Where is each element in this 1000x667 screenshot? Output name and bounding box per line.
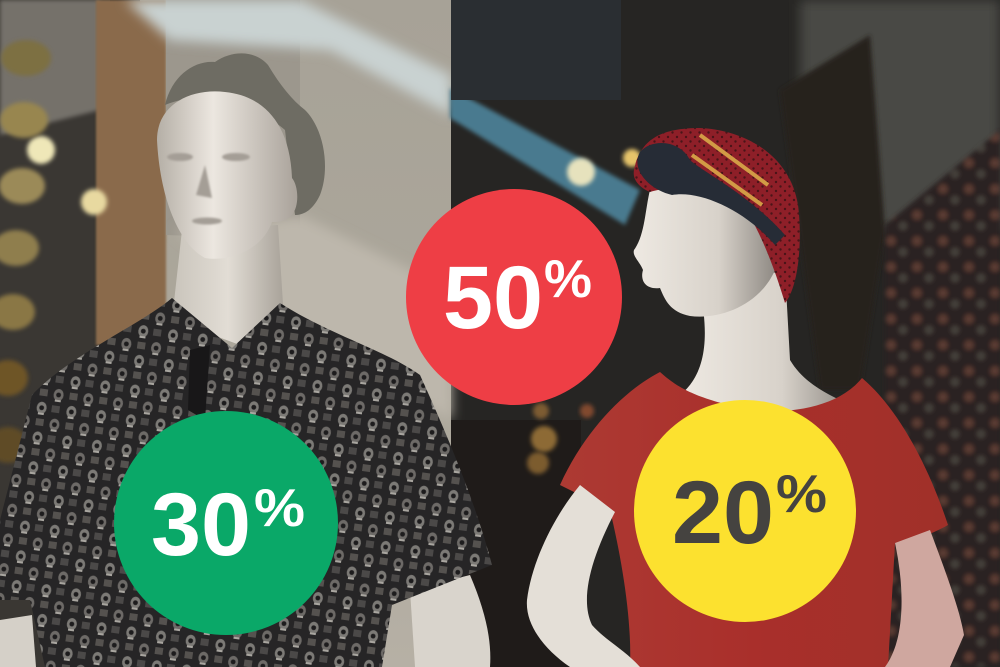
hanging ornaments on the left (0, 40, 51, 463)
turban stripes (692, 135, 768, 205)
badge: 20%: 20 (672, 462, 774, 562)
female mannequin head (634, 185, 775, 317)
red dress (560, 372, 948, 667)
badge: 20%: % (776, 465, 827, 524)
patterned shirt (0, 298, 492, 667)
male mannequin arm (410, 575, 490, 667)
female mannequin right arm (885, 530, 964, 667)
male mannequin hat (165, 53, 325, 215)
male mannequin face (167, 153, 250, 224)
female mannequin (527, 128, 964, 667)
badge: 50%: 50 (443, 247, 543, 347)
badge: 30% (114, 411, 338, 635)
male mannequin head (157, 91, 297, 259)
badge: 30%: % (254, 479, 305, 538)
red turban (634, 128, 800, 303)
badge: 50% (406, 189, 622, 405)
shirt placket (188, 345, 210, 420)
female mannequin neck and chest (680, 270, 850, 440)
male mannequin neck (172, 225, 284, 345)
badge: 20% (634, 400, 856, 622)
badge: 30%: 30 (151, 474, 251, 574)
badge: 50%: % (544, 250, 592, 309)
turban knot (637, 143, 785, 245)
bokeh lights (27, 136, 641, 474)
female mannequin left arm (527, 485, 640, 667)
male mannequin hand (0, 615, 36, 667)
male mannequin (0, 53, 492, 667)
